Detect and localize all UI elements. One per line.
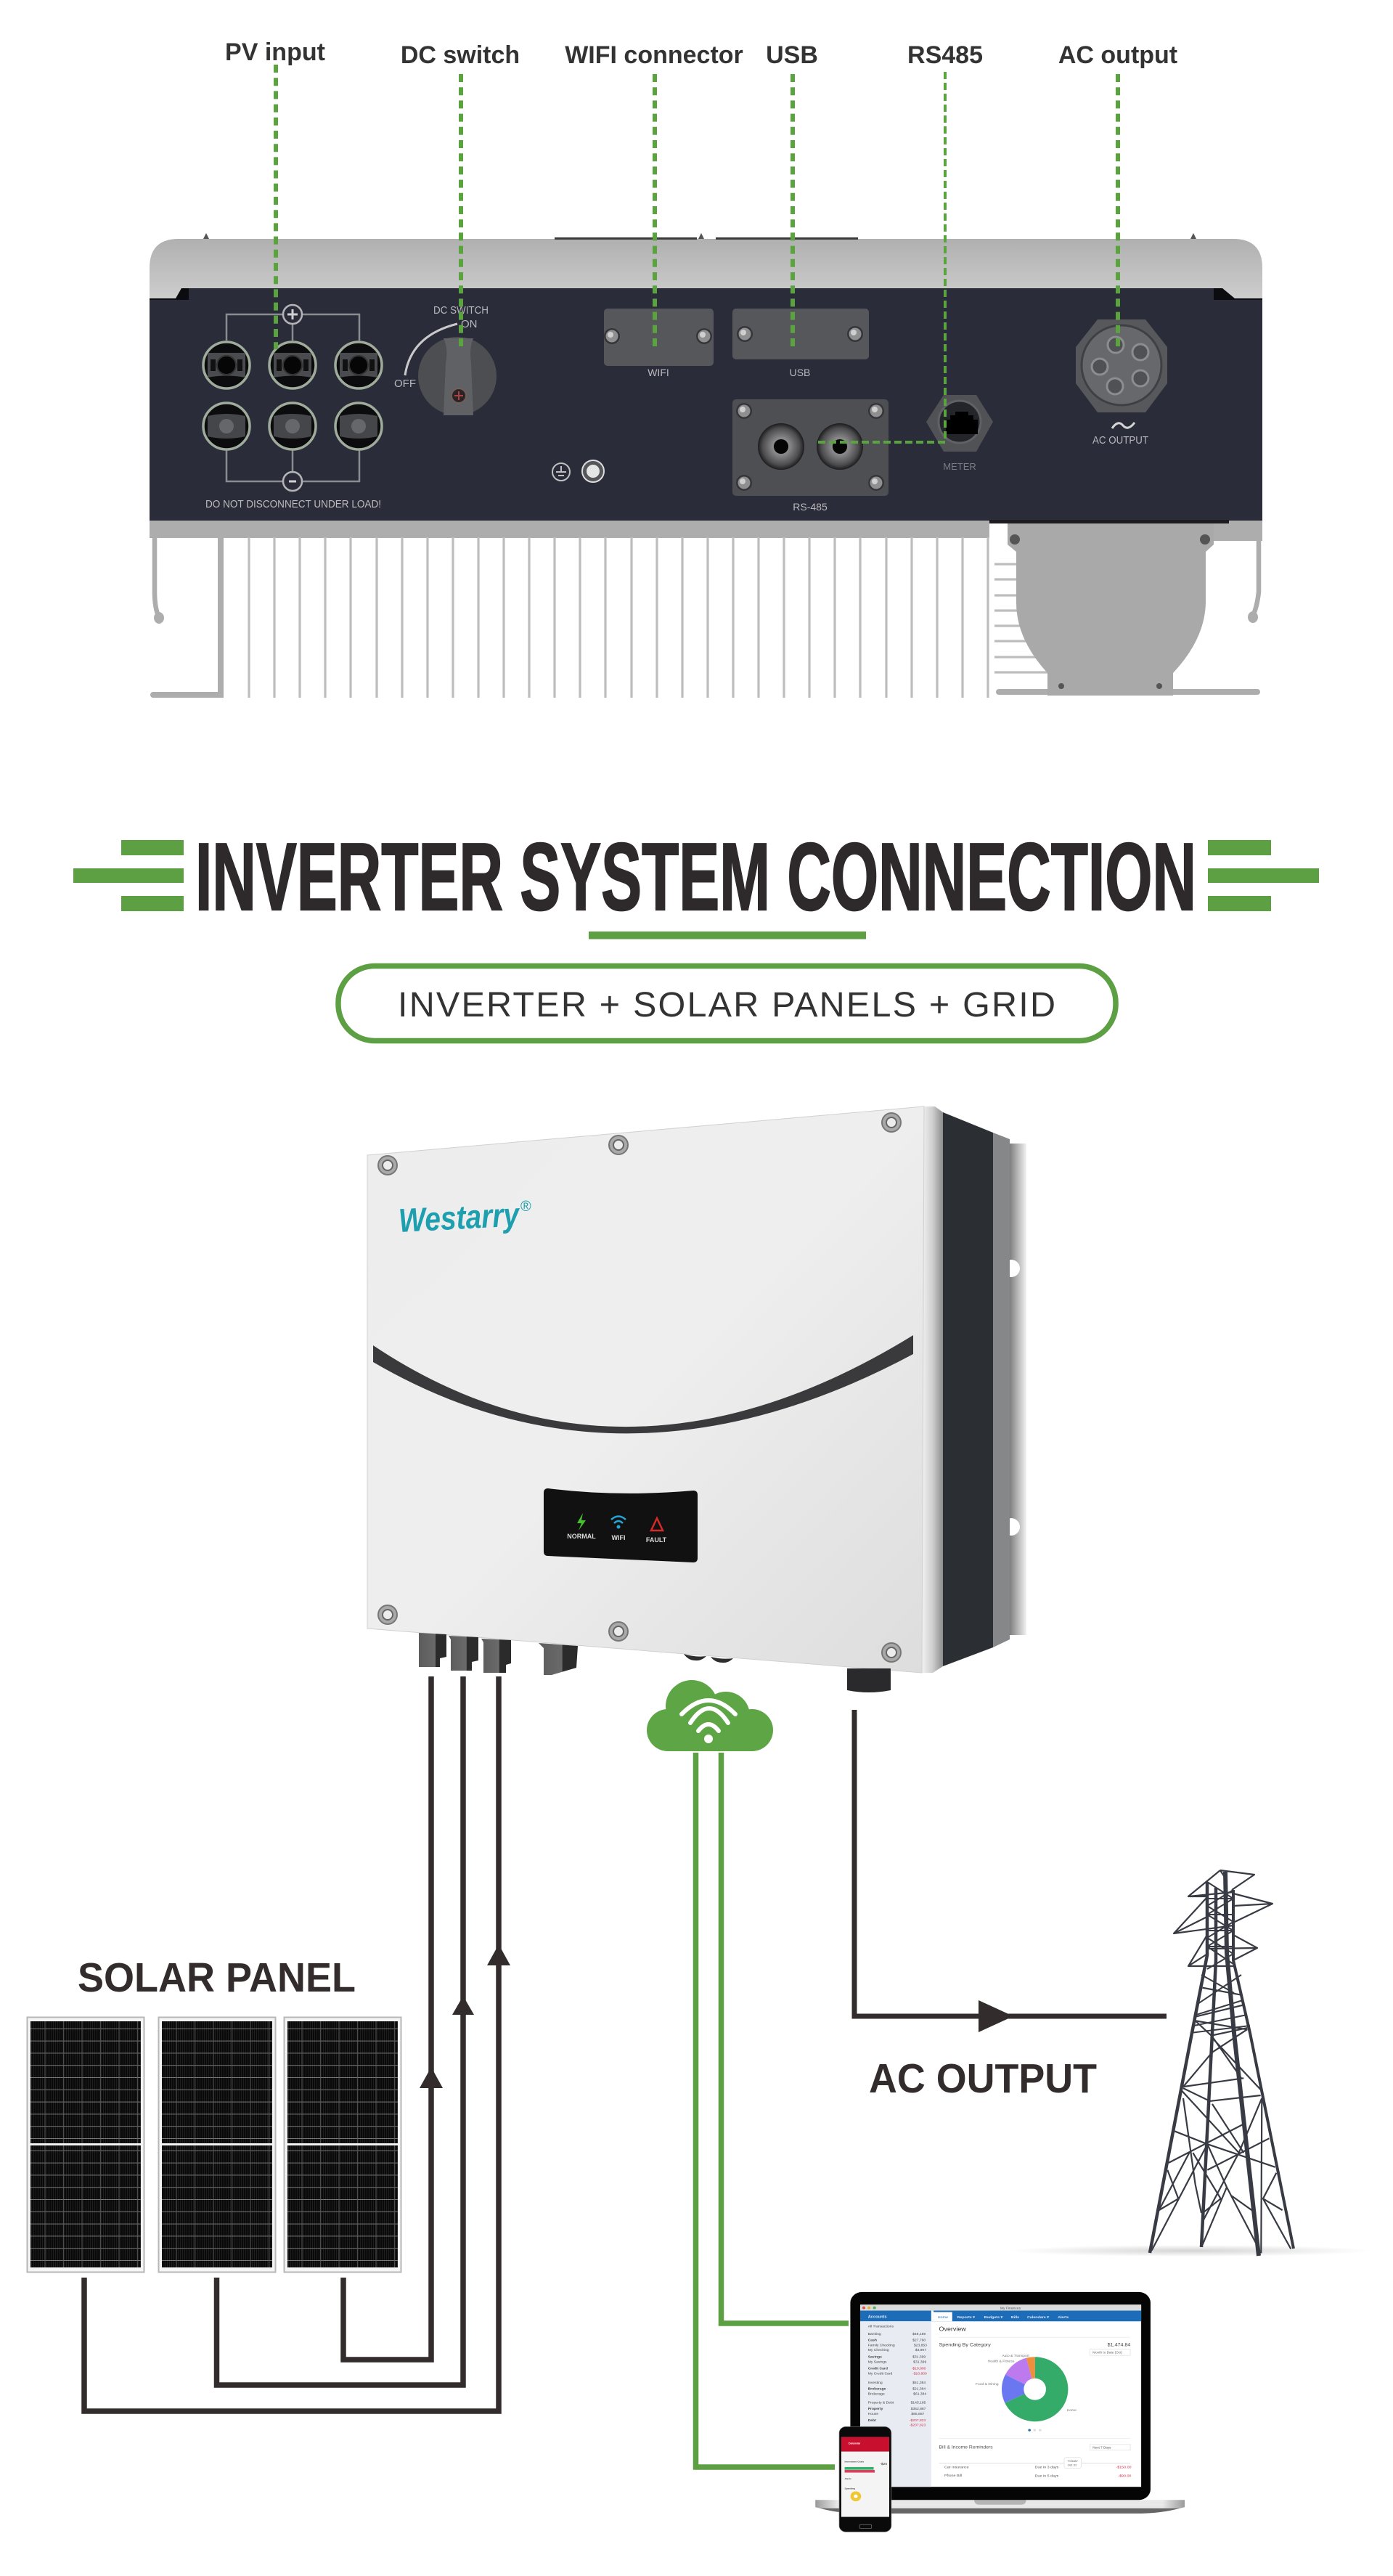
tower legs [1150,1872,1294,2256]
title underline [589,932,866,939]
laptop bezel [850,2292,1151,2500]
nav bar: Home [938,2315,948,2320]
cloud wifi icon [647,1680,773,1751]
label: AC output: AC output [1058,41,1177,69]
switch arc [405,324,457,375]
sidebar: -$207,823 [910,2424,926,2427]
label: RS485: RS485 [907,41,983,69]
DC switch knob [418,337,497,415]
chart labels: Home [1067,2408,1077,2413]
reminders: -$150.00 [1116,2466,1132,2470]
laptop and phone [815,2292,1185,2532]
reminders: -$90.00 [1118,2474,1132,2478]
chart labels [976,2354,1077,2413]
sidebar: $27,760 [912,2339,926,2342]
title bar: My Finances [1000,2307,1021,2310]
sidebar: Cash [868,2339,877,2342]
sidebar: -$10,800 [912,2372,927,2376]
sidebar: -$207,823 [910,2418,926,2423]
short fins [994,564,1050,672]
sidebar: My Credit Card [868,2372,893,2376]
label: USB: USB [766,41,818,69]
USB label: USB [790,367,810,378]
lower gray strip [150,521,989,538]
dark side [943,1112,993,1666]
AC tilde [1112,423,1135,428]
switch text: DC SWITCH: DC SWITCH [433,304,489,317]
sidebar [860,2321,931,2487]
right strip [1214,521,1262,541]
sidebar: $145,185 [911,2401,926,2405]
RS-485 label: RS-485 [793,501,828,513]
plus symbol [283,305,302,324]
phone [839,2426,891,2532]
laptop screen [860,2304,1141,2487]
sidebar: My Checking [868,2348,889,2352]
dark connection face [150,288,1262,521]
warning text: DO NOT DISCONNECT UNDER LOAD! [205,498,381,510]
PV bottom connectors [203,403,382,449]
title decoration left [73,840,184,911]
phone: Investment Goals [845,2460,865,2463]
right foot [999,689,1257,695]
base lower edge [820,2508,1180,2514]
chart labels: Food & Dining [976,2382,999,2387]
sidebar: $352,887 [911,2407,926,2411]
ground bolt [582,460,604,482]
wall plate [1008,521,1214,696]
sidebar: $48,159 [912,2332,926,2336]
sidebar: $21,384 [912,2387,926,2391]
AC arrow [979,2000,1013,2032]
sidebar: Debt [868,2418,876,2423]
subtitle pill [338,966,1116,1041]
spending heading: $1,474.84 [1108,2343,1131,2348]
tower top lattice [1190,1882,1250,2033]
RS-485 plate [732,399,889,496]
small domes [684,1654,733,1663]
arrow up 1 [420,2067,443,2088]
sidebar: Property & Debt [868,2401,894,2405]
title bar [860,2304,1141,2310]
shadow bar above plate [989,520,1229,523]
PV circuit lines [226,314,359,481]
METER label: METER [943,461,976,472]
cable: panel 1 to inverter [84,1676,499,2411]
status panel: WIFI [611,1534,626,1541]
sidebar: Brokerage [868,2387,886,2391]
sidebar: Savings [868,2355,882,2359]
laptop base [815,2500,1185,2514]
meter port [926,395,993,452]
sidebar: Investing [868,2381,883,2385]
inverter front view [367,1106,1026,1692]
status panel: FAULT [646,1536,667,1544]
gray side strip [993,1133,1010,1647]
arrow up 3 [487,1944,510,1965]
sidebar: Credit Card [868,2367,888,2371]
reminders: Car Insurance [944,2466,969,2470]
sidebar: All Transactions [868,2325,894,2328]
sidebar: Property [868,2407,883,2411]
swoosh [373,1335,913,1433]
reminders: Phone Bill [944,2474,962,2478]
AC OUTPUT label: AC OUTPUT [1092,434,1148,447]
sidebar: $31,399 [912,2355,926,2359]
front face [367,1106,924,1673]
top mounting bars [555,237,858,240]
AC output cable [854,1710,1167,2016]
nav bar: Alerts [1058,2315,1069,2320]
AC plug [847,1668,891,1692]
label: WIFI connector: WIFI connector [565,41,743,69]
AC OUTPUT heading: AC OUTPUT [869,2055,1097,2102]
inverter rear connection panel [150,233,1262,698]
left clip end [154,612,164,624]
left bracket [153,537,221,695]
title decoration right [1208,840,1319,911]
sidebar: -$10,800 [912,2367,926,2371]
spending heading [939,2337,1131,2438]
green network cables [695,1753,849,2467]
nav bar [860,2310,1141,2321]
cable: panel 2 to inverter [216,1676,463,2385]
label: PV input: PV input [225,38,325,66]
cable: panel 3 to inverter [343,1676,431,2360]
phone: Spending [845,2487,855,2490]
sidebar: House [868,2412,878,2416]
nav bar: Accounts [868,2315,887,2320]
PV top connectors [203,342,382,388]
spending heading: Spending By Category [939,2343,991,2348]
bright edge [922,1106,943,1673]
mounting bracket [1002,1144,1026,1635]
sidebar: $85,887 [911,2412,925,2416]
communication plug [539,1643,578,1675]
chart labels: Auto & Transport [1002,2354,1030,2358]
arrow up 2 [452,1996,474,2015]
right clip [1253,541,1259,616]
tower ground shadow [1009,2245,1372,2257]
chart labels: Health & Fitness [988,2360,1015,2363]
solar panel 2 [158,2017,276,2273]
SOLAR PANEL heading: SOLAR PANEL [78,1955,356,2001]
phone: -$25 [880,2462,887,2466]
nav bar: Reports ▾ [957,2315,975,2320]
status panel [544,1488,698,1562]
subtitle pill: INVERTER + SOLAR PANELS + GRID [398,985,1055,1024]
sidebar: $61,384 [912,2381,926,2385]
small top ticks [203,233,1196,239]
logo: Westarry [398,1195,521,1239]
reminders: Due in 3 days [1035,2466,1059,2470]
spending heading: Month to Date (Oct) [1092,2351,1122,2354]
sidebar: $3,907 [915,2348,926,2352]
plate screws [1010,534,1210,689]
solar panel 3 [285,2017,401,2273]
PV plugs [419,1633,511,1673]
sidebar: Banking [868,2332,881,2336]
nav bar: Budgets ▾ [984,2315,1003,2320]
sidebar: Family Checking [868,2344,895,2347]
WIFI plate [604,309,714,366]
reminders: TODAY [1068,2459,1078,2463]
USB plate [732,309,869,359]
overview heading: Overview [939,2326,967,2332]
donut chart [1002,2357,1068,2421]
switch text: OFF: OFF [394,378,416,390]
ground symbol [552,463,570,481]
left clip [155,537,159,617]
heat sink fins [249,537,988,698]
base notch [974,2500,1026,2505]
switch text: ON: ON [461,318,478,330]
solar panel 1 [28,2017,144,2273]
registered mark: ® [520,1199,531,1215]
sidebar: $23,853 [914,2344,927,2347]
reminders: Next 7 Days [1092,2446,1111,2450]
reminders [939,2445,1132,2478]
status panel: NORMAL [567,1533,596,1540]
pager dots [1028,2429,1042,2432]
sidebar: $61,384 [913,2392,927,2396]
label: DC switch: DC switch [401,41,520,69]
WIFI label: WIFI [648,367,669,378]
tower arms [1174,1870,1273,1966]
sidebar: My Savings [868,2360,887,2364]
right clip end [1248,611,1258,623]
AC output connector [1076,319,1167,412]
nav bar: Bills [1011,2315,1019,2320]
reminders: Bill & Income Reminders [939,2445,993,2450]
sidebar: $31,399 [913,2360,927,2364]
reminders: Due in 5 days [1035,2474,1059,2478]
shadow wedges at corners [150,288,1262,300]
phone: Alerts [845,2477,851,2480]
minus symbol [283,472,302,491]
dashed leader lines [276,65,1118,442]
reminders: Oct 31 [1068,2463,1077,2466]
sidebar: Brokerage [868,2392,885,2396]
transmission tower [1150,1870,1294,2256]
face screws [378,1113,901,1662]
phone: Calendar [849,2442,861,2445]
top housing [150,239,1262,305]
nav bar: Calendars ▾ [1027,2315,1049,2320]
tower lower lattice [1152,1988,1291,2253]
